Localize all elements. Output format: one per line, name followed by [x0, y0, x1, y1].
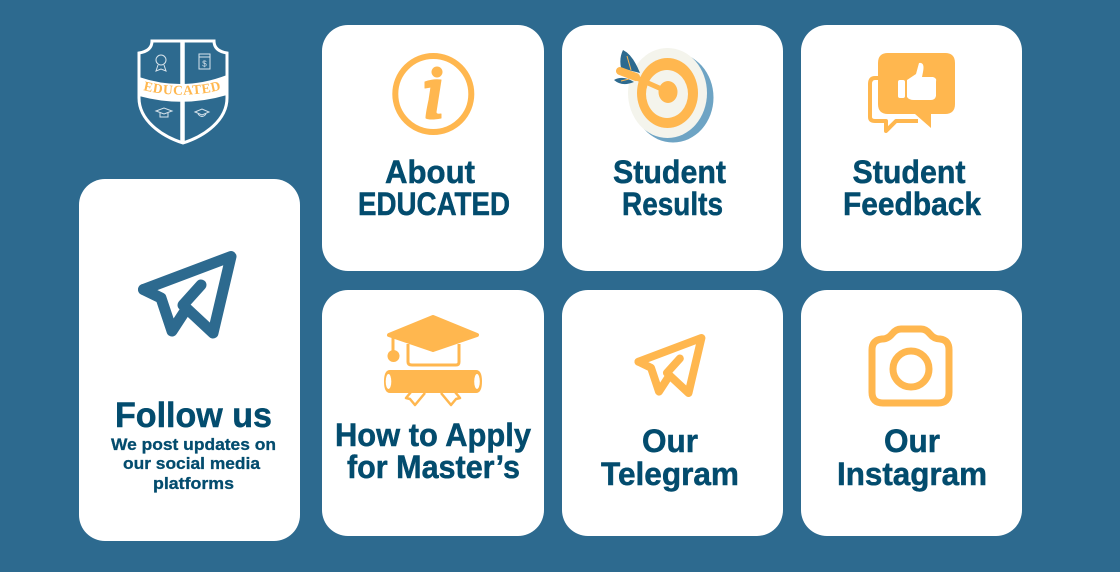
text: follow us description	[111, 435, 276, 493]
icon: info	[395, 56, 471, 132]
icon: thumbs up speech bubbles	[870, 53, 955, 131]
heading: our instagram: Instagram	[837, 456, 987, 492]
heading: our telegram: Telegram	[601, 456, 739, 492]
panel: how to apply	[322, 290, 544, 536]
text: follow us description: our social media	[123, 454, 261, 473]
icon: graduation cap and diploma	[384, 317, 482, 405]
heading: our instagram: Our	[884, 423, 940, 459]
panel: our instagram	[801, 290, 1022, 536]
heading: student feedback: Student	[852, 154, 966, 190]
heading: student results: Student	[613, 154, 726, 190]
heading: student results: Results	[622, 186, 723, 222]
logo: EDUCATED shield: EDUCATED	[143, 82, 220, 95]
heading: student results	[613, 154, 726, 222]
heading: about educated: EDUCATED	[358, 186, 510, 222]
text: follow us description: We post updates on	[111, 435, 276, 454]
heading: our telegram: Our	[642, 423, 698, 459]
icon: camera	[872, 329, 949, 403]
heading: follow us: Follow us	[115, 396, 272, 435]
panel: about educated	[322, 25, 544, 271]
icon: target with arrow	[614, 48, 714, 142]
heading: about educated: About	[385, 154, 475, 190]
heading: our telegram	[601, 423, 739, 492]
panel: our telegram	[562, 290, 783, 536]
icon: telegram plane	[144, 256, 231, 333]
panel: student results	[562, 25, 783, 271]
heading: how to apply: How to Apply	[335, 417, 531, 453]
heading: student feedback	[843, 154, 981, 222]
logo: EDUCATED shield: $	[202, 60, 207, 68]
heading: our instagram	[837, 423, 987, 492]
heading: about educated	[358, 154, 510, 222]
panel: follow us	[79, 179, 300, 541]
heading: how to apply: for Master’s	[347, 449, 520, 485]
text: follow us description: platforms	[153, 474, 234, 493]
panel: student feedback	[801, 25, 1022, 271]
heading: how to apply	[335, 417, 531, 485]
icon: telegram plane	[638, 338, 701, 393]
logo: EDUCATED shield	[138, 40, 228, 145]
heading: student feedback: Feedback	[843, 186, 981, 222]
